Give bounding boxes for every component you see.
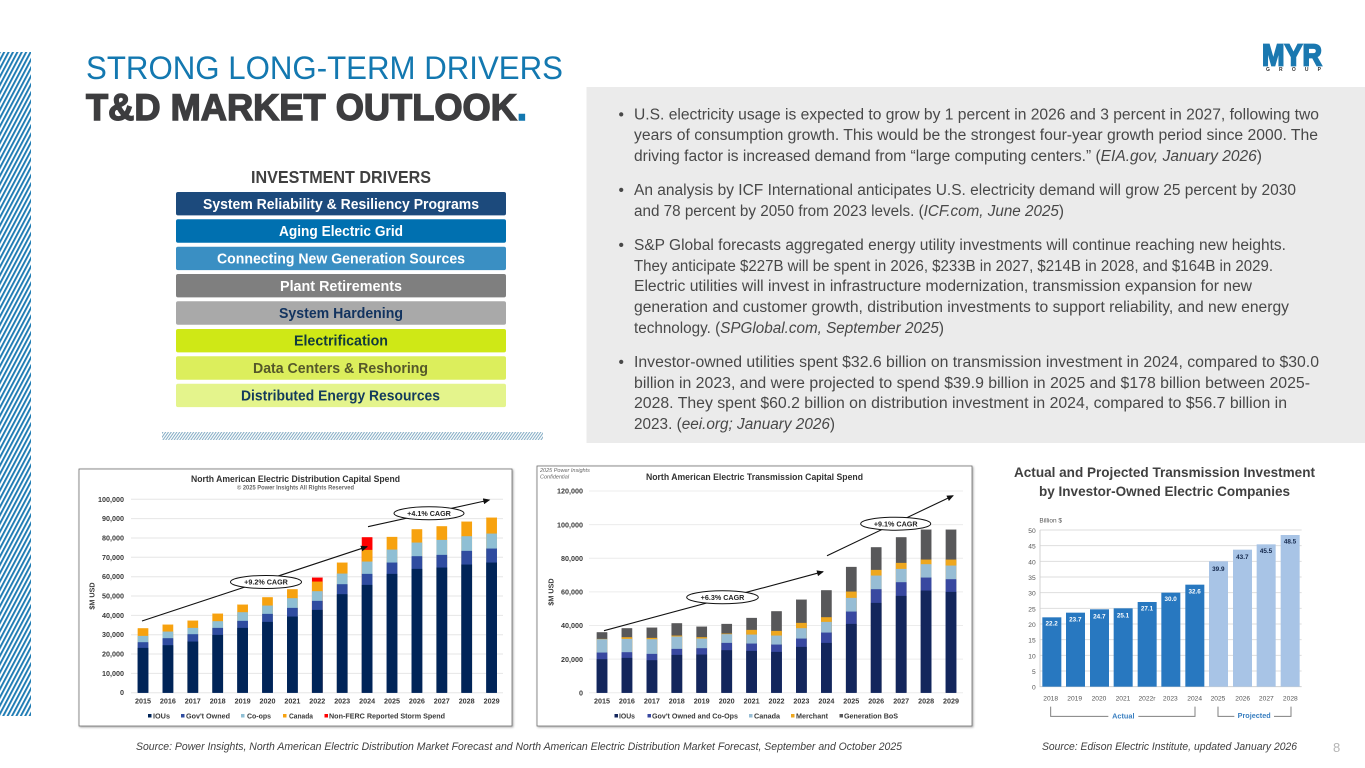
x axis labels: 2020	[719, 696, 735, 706]
x axis labels: 2025	[1211, 696, 1226, 703]
chart title: distribution: North American Electric Distribution Capital Spend	[191, 474, 400, 484]
driver: connecting new generation: Connecting New Generation Sources	[217, 252, 465, 268]
decorative hatch band	[0, 52, 31, 716]
value labels	[1046, 539, 1297, 627]
legend: transmission	[614, 712, 898, 720]
bars: projected	[1209, 535, 1300, 687]
x axis labels: 2018	[1043, 696, 1058, 703]
panel: investment drivers	[176, 167, 506, 407]
bullet: S&P Global forecast: technology. (SPGlobal.com, September 2025)	[634, 320, 944, 337]
legend: transmission: Gov't Owned and Co-Ops	[652, 712, 738, 720]
bullet: investor-owned utilities	[618, 354, 1319, 433]
y axis labels: 90,000	[102, 514, 124, 523]
y axis labels: 50,000	[102, 592, 124, 600]
x axis labels: 2019	[235, 696, 251, 706]
x axis labels	[135, 696, 500, 706]
y axis title: $M USD	[88, 582, 96, 610]
chart heading: transmission investment: by Investor-Owned Electric Companies	[1039, 483, 1290, 499]
y axis labels: 20,000	[561, 655, 583, 664]
panel: market commentary	[586, 87, 1365, 443]
legend: distribution: Canada	[289, 712, 314, 720]
x axis labels: 2017	[185, 696, 201, 706]
legend: transmission: Canada	[754, 712, 781, 720]
bullet: electricity usage: driving factor is increased demand from “large computing centers.” (EIA.gov, January 2026)	[634, 148, 1262, 165]
callout: +9.2% CAGR	[230, 576, 302, 588]
callout: +4.1% CAGR: +4.1% CAGR	[407, 509, 452, 518]
bullet: S&P Global forecast	[618, 237, 1289, 337]
driver: electrification	[176, 329, 506, 352]
x axis labels: 2029	[484, 696, 500, 706]
value labels: 48.5	[1284, 539, 1297, 546]
bullet: investor-owned utilities: billion in 2023, and were projected to spend $39.9 billion in 2025 and $178 billion between 2025-	[634, 375, 1310, 392]
y axis labels: 80,000	[102, 534, 124, 542]
chart title: distribution	[191, 474, 400, 492]
chart: distribution capital spend	[79, 469, 512, 726]
bullet: electricity usage: •	[618, 106, 624, 124]
x axis labels: 2025	[384, 696, 400, 706]
title: T&D MARKET OUTLOOK.	[86, 87, 527, 128]
arrow: historic CAGR trend	[604, 572, 823, 631]
x axis labels: 2026	[1235, 696, 1250, 703]
x axis labels: 2016	[160, 696, 176, 706]
callout: +9.1% CAGR: +9.1% CAGR	[874, 519, 918, 528]
y axis labels: 60,000	[561, 588, 583, 597]
stacked bars: distribution	[138, 518, 497, 693]
x axis labels: 2018	[210, 696, 226, 706]
y axis labels: 60,000	[102, 572, 124, 581]
y axis labels	[557, 487, 583, 697]
value labels: 27.1	[1141, 606, 1154, 613]
bullet: investor-owned utilities: •	[618, 354, 624, 371]
x axis labels: 2024	[359, 696, 375, 706]
y axis labels: 0	[579, 688, 583, 697]
bullet: S&P Global forecast: Electric utilities will invest in infrastructure modernization, transmission expansion for new	[634, 278, 1253, 295]
confidentiality note	[539, 468, 590, 480]
x axis labels: 2027	[893, 696, 909, 706]
bullet: ICF analysis: •	[618, 182, 624, 199]
confidentiality note: 2025 Power Insights	[539, 468, 590, 474]
x axis labels: 2024	[1187, 696, 1202, 703]
legend: distribution: IOUs	[153, 712, 170, 720]
chart heading: transmission investment	[1014, 464, 1315, 499]
chart title: distribution: © 2025 Power Insights All Rights Reserved	[237, 484, 354, 492]
value labels: 25.1	[1117, 612, 1130, 619]
callout: +4.1% CAGR	[394, 507, 464, 520]
legend: distribution: Co-ops	[247, 712, 271, 720]
x axis labels: 2018	[669, 696, 685, 706]
x axis labels: 2019	[694, 696, 710, 706]
driver: connecting new generation	[176, 247, 506, 270]
bracket: actual: Actual	[1112, 712, 1135, 721]
x axis labels: 2017	[644, 696, 660, 706]
page number: 8	[1333, 740, 1340, 755]
heading: investment drivers: INVESTMENT DRIVERS	[251, 167, 431, 187]
x axis labels: 2016	[619, 696, 635, 706]
x axis labels: 2029	[943, 696, 959, 706]
source: power insights: Source: Power Insights, North American Electric Distribution Market Forecast and North American Electric Distribution Market Forecast, September and October 2025	[136, 741, 903, 753]
driver: plant retirements: Plant Retirements	[280, 279, 402, 295]
value labels: 43.7	[1236, 554, 1249, 561]
y axis labels: 80,000	[561, 554, 583, 563]
x axis labels: 2026	[868, 696, 884, 706]
bullet: investor-owned utilities: 2023. (eei.org; January 2026)	[634, 416, 835, 433]
value labels: 22.2	[1046, 620, 1058, 627]
x axis labels: 2028	[459, 696, 475, 706]
y axis labels: 40,000	[561, 621, 583, 630]
x axis labels: 2027	[1259, 696, 1274, 703]
driver: electrification: Electrification	[294, 334, 388, 350]
driver: plant retirements	[176, 274, 506, 297]
x axis labels: 2021	[284, 696, 300, 706]
y axis labels: 35	[1028, 575, 1036, 582]
bracket: actual	[1051, 707, 1195, 721]
x axis labels: 2024	[818, 696, 834, 706]
driver: aging electric grid: Aging Electric Grid	[279, 224, 403, 240]
logo: MYR Group: G R O U P	[1266, 67, 1322, 73]
x axis labels: 2023	[793, 696, 809, 706]
bullet: electricity usage: U.S. electricity usage is expected to grow by 1 percent in 2026 and 3 percent in 2027, following two	[634, 106, 1319, 124]
driver: distributed energy: Distributed Energy Resources	[241, 388, 440, 404]
chart title: transmission: North American Electric Transmission Capital Spend	[646, 472, 863, 482]
callout: +9.1% CAGR	[861, 517, 931, 530]
y axis labels: 100,000	[98, 495, 124, 504]
y axis labels: 50	[1028, 528, 1036, 535]
x axis labels: 2021	[1116, 696, 1131, 703]
y axis labels: 40	[1028, 559, 1036, 566]
bullet: ICF analysis	[618, 182, 1296, 220]
y axis labels: 70,000	[102, 553, 124, 562]
driver: data centers	[176, 356, 506, 380]
value labels: 30.0	[1165, 596, 1177, 603]
y axis labels: 10	[1028, 653, 1036, 660]
x axis labels: 2019	[1067, 696, 1082, 703]
x axis labels: 2015	[135, 696, 151, 706]
y axis labels: 20,000	[102, 650, 124, 658]
x axis labels: 2025	[843, 696, 859, 706]
chart: actual and projected investment: Billion $	[1039, 517, 1062, 524]
y axis labels: 5	[1032, 669, 1036, 676]
y axis labels: 30,000	[102, 630, 124, 639]
y axis labels	[1028, 528, 1036, 692]
y axis labels: 25	[1028, 606, 1036, 613]
x axis labels	[1043, 696, 1298, 703]
x axis labels: 2027	[434, 696, 450, 706]
logo: MYR Group: MYR	[1262, 38, 1322, 72]
y axis labels: 30	[1028, 591, 1036, 598]
legend: transmission: Merchant	[796, 712, 829, 720]
arrow: forecast CAGR trend	[827, 496, 953, 556]
chart heading: transmission investment: Actual and Projected Transmission Investment	[1014, 464, 1315, 480]
x axis labels: 2015	[594, 696, 610, 706]
bullet: ICF analysis: and 78 percent by 2050 from 2023 levels. (ICF.com, June 2025)	[634, 203, 1064, 220]
bullet: ICF analysis: An analysis by ICF International anticipates U.S. electricity demand will grow 25 percent by 2030	[634, 182, 1296, 199]
title	[86, 50, 563, 128]
bullet: electricity usage	[618, 106, 1319, 165]
driver: distributed energy	[176, 384, 506, 407]
x axis labels: 2022	[768, 696, 784, 706]
bracket: projected: Projected	[1238, 711, 1271, 720]
chart: actual and projected investment	[1028, 517, 1302, 721]
x axis labels: 2022r	[1138, 696, 1156, 703]
bullet: S&P Global forecast: S&P Global forecasts aggregated energy utility investments will continue reaching new heights.	[634, 237, 1286, 254]
x axis labels: 2022	[309, 696, 325, 706]
x axis labels: 2026	[409, 696, 425, 706]
value labels: 23.7	[1069, 616, 1082, 623]
x axis labels: 2020	[260, 696, 276, 706]
legend: distribution: Gov't Owned	[186, 712, 230, 720]
y axis title: $M USD	[546, 578, 556, 606]
x axis labels: 2028	[918, 696, 934, 706]
y axis labels: 40,000	[102, 611, 124, 620]
legend: transmission: IOUs	[619, 712, 635, 720]
x axis labels: 2028	[1283, 696, 1298, 703]
arrow: historic CAGR trend	[142, 547, 367, 621]
value labels: 24.7	[1093, 613, 1106, 620]
driver: system reliability	[176, 192, 506, 215]
bullet: investor-owned utilities: Investor-owned utilities spent $32.6 billion on transmission investment in 2024, compared to $30.0	[634, 354, 1319, 371]
confidentiality note: Confidential	[540, 474, 570, 480]
bullet: investor-owned utilities: 2028. They spent $60.2 billion on distribution investment in 2024, compared to $56.7 billion in	[634, 395, 1287, 412]
y axis labels: 0	[120, 688, 124, 697]
source: edison electric institute: Source: Edison Electric Institute, updated January 2026	[1042, 741, 1298, 753]
chart: transmission capital spend	[537, 466, 972, 726]
x axis labels: 2021	[744, 696, 760, 706]
callout: +6.3% CAGR	[687, 591, 758, 604]
x axis labels: 2020	[1092, 696, 1107, 703]
value labels: 39.9	[1212, 566, 1225, 573]
stacked bars: transmission	[597, 530, 956, 693]
bracket: projected	[1218, 707, 1291, 720]
value labels: 32.6	[1189, 588, 1201, 595]
title: STRONG LONG-TERM DRIVERS	[86, 50, 563, 86]
y axis labels: 0	[1032, 685, 1036, 692]
callout: +9.2% CAGR: +9.2% CAGR	[244, 578, 289, 587]
driver: aging electric grid	[176, 219, 506, 243]
y axis labels: 20	[1028, 622, 1036, 629]
x axis labels: 2023	[1163, 696, 1178, 703]
x axis labels: 2023	[334, 696, 350, 706]
y axis labels	[98, 495, 124, 697]
driver: data centers: Data Centers & Reshoring	[253, 361, 428, 377]
legend: distribution	[148, 712, 445, 720]
driver: system hardening: System Hardening	[279, 306, 403, 322]
bars: actual	[1042, 585, 1204, 687]
bullet: S&P Global forecast: •	[618, 237, 624, 254]
arrow: forecast CAGR trend	[368, 500, 489, 527]
y axis labels: 120,000	[557, 487, 583, 496]
bullet: S&P Global forecast: They anticipate $227B will be spent in 2026, $233B in 2027, $214B in 2028, and $164B in 2029.	[634, 258, 1273, 275]
x axis labels	[594, 696, 959, 706]
bullet: S&P Global forecast: generation and customer growth, distribution investments to support reliability, and new energy	[634, 299, 1289, 316]
driver: system reliability: System Reliability & Resiliency Programs	[203, 197, 479, 213]
callout: +6.3% CAGR: +6.3% CAGR	[701, 593, 745, 602]
bullet: electricity usage: years of consumption growth. This would be the strongest four-year growth period since 2000. The	[634, 127, 1318, 144]
driver: system hardening	[176, 301, 506, 325]
legend: transmission: Generation BoS	[844, 712, 898, 720]
y axis labels: 10,000	[102, 669, 124, 678]
y axis labels: 45	[1028, 544, 1036, 551]
legend: distribution: Non-FERC Reported Storm Spend	[329, 712, 445, 720]
y axis labels: 15	[1028, 638, 1036, 645]
y axis labels: 100,000	[557, 520, 583, 529]
value labels: 45.5	[1260, 548, 1273, 555]
